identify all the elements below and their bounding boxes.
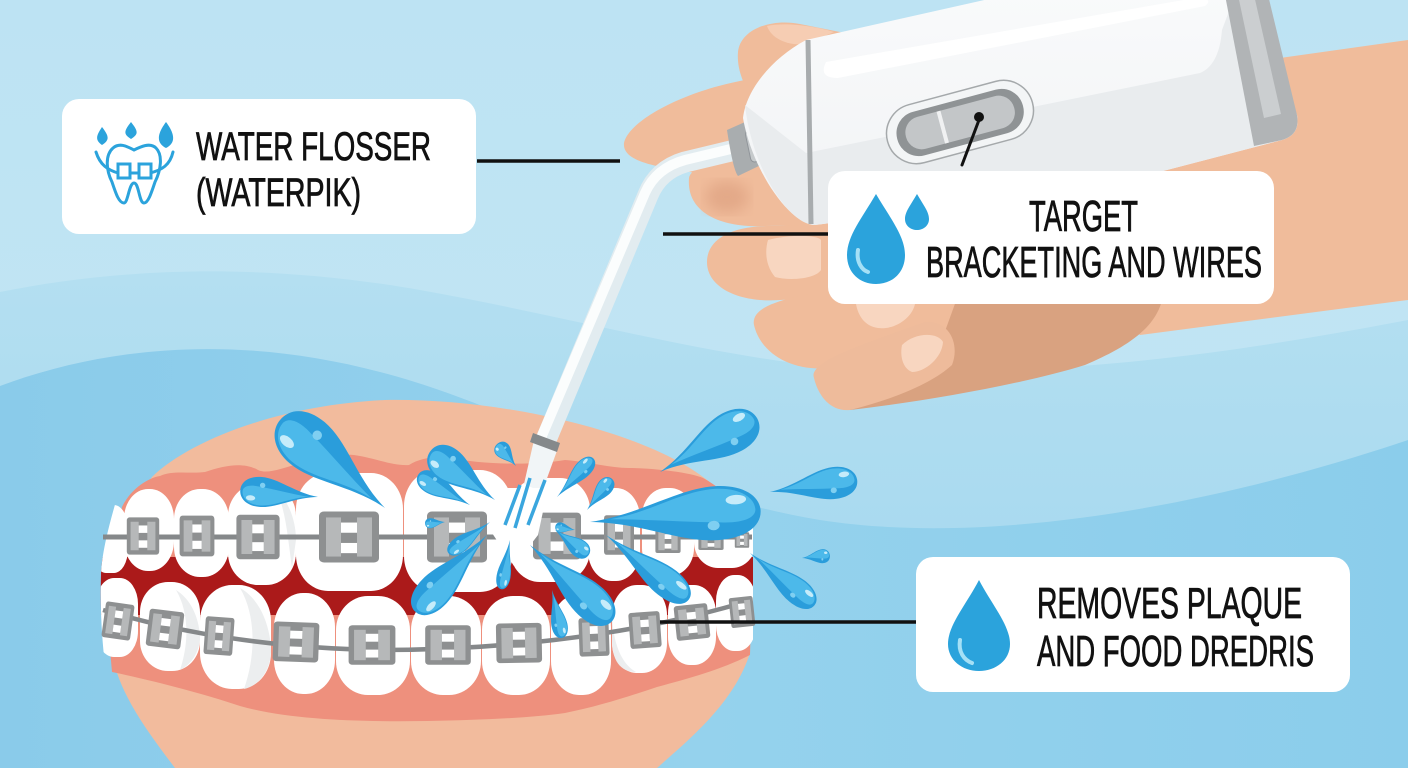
mouth illustration — [92, 400, 756, 768]
upper brackets — [127, 512, 749, 562]
splashing water drops — [239, 399, 859, 640]
palm shadow — [850, 295, 1163, 410]
third finger — [707, 222, 900, 300]
icon: water drop — [948, 580, 1010, 671]
nozzle tip — [524, 440, 558, 492]
label text — [926, 192, 1262, 287]
callout: target bracketing and wires — [828, 171, 1274, 304]
second finger — [689, 160, 830, 226]
wrist — [1000, 40, 1408, 335]
nozzle tube — [541, 148, 735, 440]
label text: TARGET — [1029, 192, 1138, 241]
icon: tooth with braces and drops — [96, 122, 173, 203]
callout: water flosser — [62, 99, 476, 234]
leader line: target — [663, 232, 830, 236]
fourth finger — [754, 290, 960, 369]
nozzle ring — [530, 433, 560, 452]
top knuckle — [738, 22, 850, 120]
tooth shading — [176, 490, 636, 689]
slide switch — [880, 74, 1040, 170]
leader line: water flosser — [477, 159, 620, 163]
label text — [1037, 579, 1314, 676]
hand holding flosser — [624, 22, 1408, 410]
pinky finger — [814, 322, 955, 410]
label text: WATER FLOSSER — [196, 125, 431, 169]
lower gum — [102, 560, 752, 721]
nozzle collar — [727, 122, 765, 176]
body seam — [808, 40, 811, 224]
lower body shade — [745, 0, 1297, 225]
body highlight — [824, 0, 1208, 78]
top fingernail — [767, 24, 834, 44]
lips and skin around mouth — [114, 400, 752, 768]
callout: removes plaque — [916, 557, 1350, 692]
end cap band — [1225, 0, 1297, 146]
icon: water drops — [847, 194, 929, 284]
mouth interior — [100, 557, 753, 615]
lower brackets — [101, 596, 756, 665]
upper teeth — [92, 470, 756, 592]
label text: (WATERPIK) — [196, 171, 361, 215]
device body — [743, 0, 1297, 225]
water flosser device — [524, 0, 1297, 492]
leader line: removes plaque — [660, 620, 918, 624]
label text — [196, 125, 431, 215]
lower braces wire — [103, 600, 752, 650]
lower teeth — [96, 575, 756, 695]
upper braces wire — [103, 534, 752, 540]
leader line: switch — [962, 112, 984, 165]
finger shadow — [705, 181, 749, 213]
index finger — [624, 80, 790, 190]
upper gum — [105, 455, 752, 600]
